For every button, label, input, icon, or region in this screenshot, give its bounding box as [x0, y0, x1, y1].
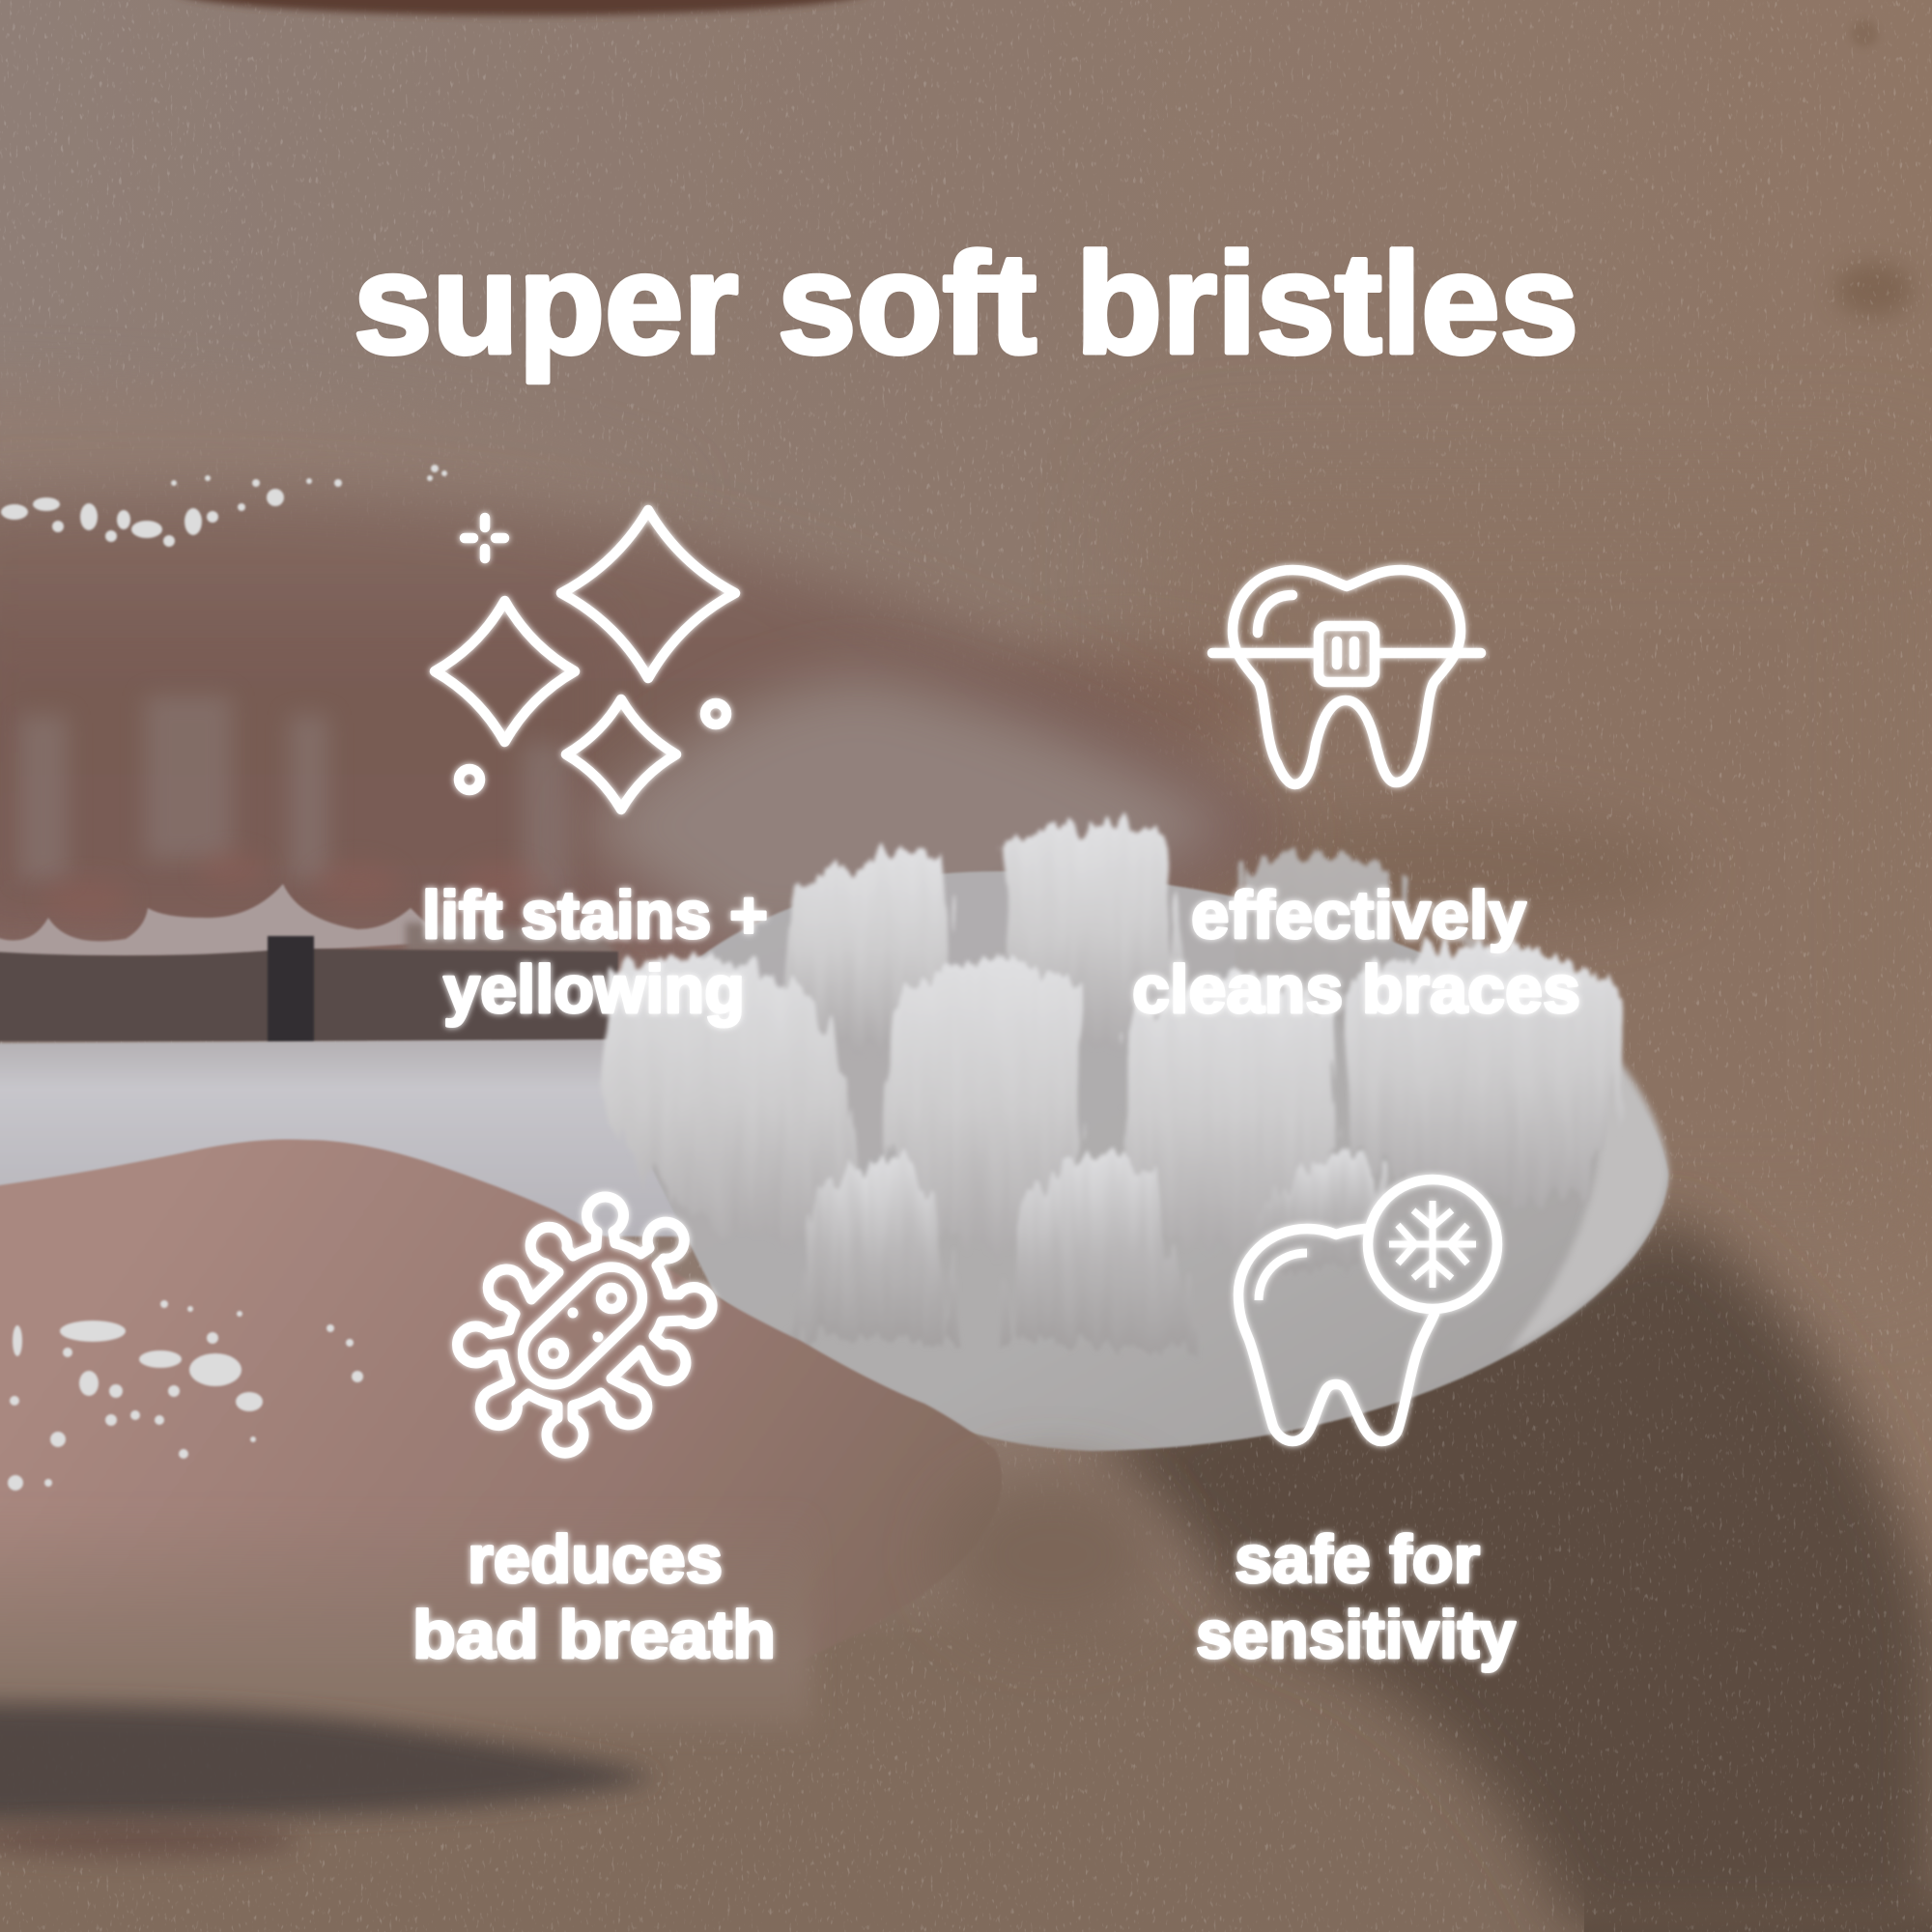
mouth gap [0, 949, 618, 1041]
top lip edge [174, 0, 869, 15]
feature: safe for sensitivity [1196, 1179, 1516, 1672]
teeth edge [0, 884, 444, 958]
label: effectively cleans braces: effectively [1191, 877, 1526, 952]
icon: tooth with braces [1212, 570, 1481, 784]
icon: tooth with snowflake [1238, 1179, 1497, 1441]
bristle tufts [604, 823, 1625, 1349]
icon: sparkles [435, 510, 735, 810]
label: lift stains + yellowing: yellowing [443, 952, 745, 1027]
label: effectively cleans braces [1132, 877, 1580, 1027]
title: super soft bristles [354, 224, 1578, 384]
label: effectively cleans braces: cleans braces [1132, 952, 1580, 1027]
shadow under brush [1092, 1217, 1932, 1932]
label: lift stains + yellowing: lift stains + [422, 877, 768, 952]
ghost bristles behind [580, 676, 1236, 947]
right cheek tone [1159, 483, 1932, 1256]
lip bottom fade [0, 1507, 811, 1729]
label: safe for sensitivity: sensitivity [1196, 1597, 1516, 1672]
upper lip [0, 494, 1294, 976]
label: reduces bad breath [412, 1521, 776, 1672]
bottom dark crease [0, 1702, 657, 1821]
lower lip [0, 1140, 1002, 1666]
feature: effectively cleans braces [1132, 570, 1580, 1027]
handle [0, 1039, 734, 1236]
upper lip gloss [1, 465, 447, 547]
label: safe for sensitivity [1196, 1521, 1516, 1672]
mouth corner [1188, 811, 1690, 927]
feature: lift stains + yellowing [422, 510, 768, 1027]
lower lip gloss [8, 1300, 363, 1491]
label: lift stains + yellowing [422, 877, 768, 1027]
label: safe for sensitivity: safe for [1235, 1521, 1480, 1597]
label: reduces bad breath: reduces [468, 1521, 723, 1597]
lip right edge fade [942, 1473, 1164, 1637]
vertical gum folds [19, 696, 570, 898]
feature: reduces bad breath [412, 1197, 776, 1672]
reddish gum edges [43, 852, 546, 918]
brush head [609, 871, 1668, 1451]
brown skin spots [1835, 263, 1913, 317]
lower skin [0, 1546, 1932, 1932]
label: reduces bad breath: bad breath [412, 1597, 776, 1672]
lighter band above upper lip [0, 386, 696, 502]
brush head rim highlight [1449, 927, 1668, 1352]
icon: bacteria [458, 1197, 712, 1453]
